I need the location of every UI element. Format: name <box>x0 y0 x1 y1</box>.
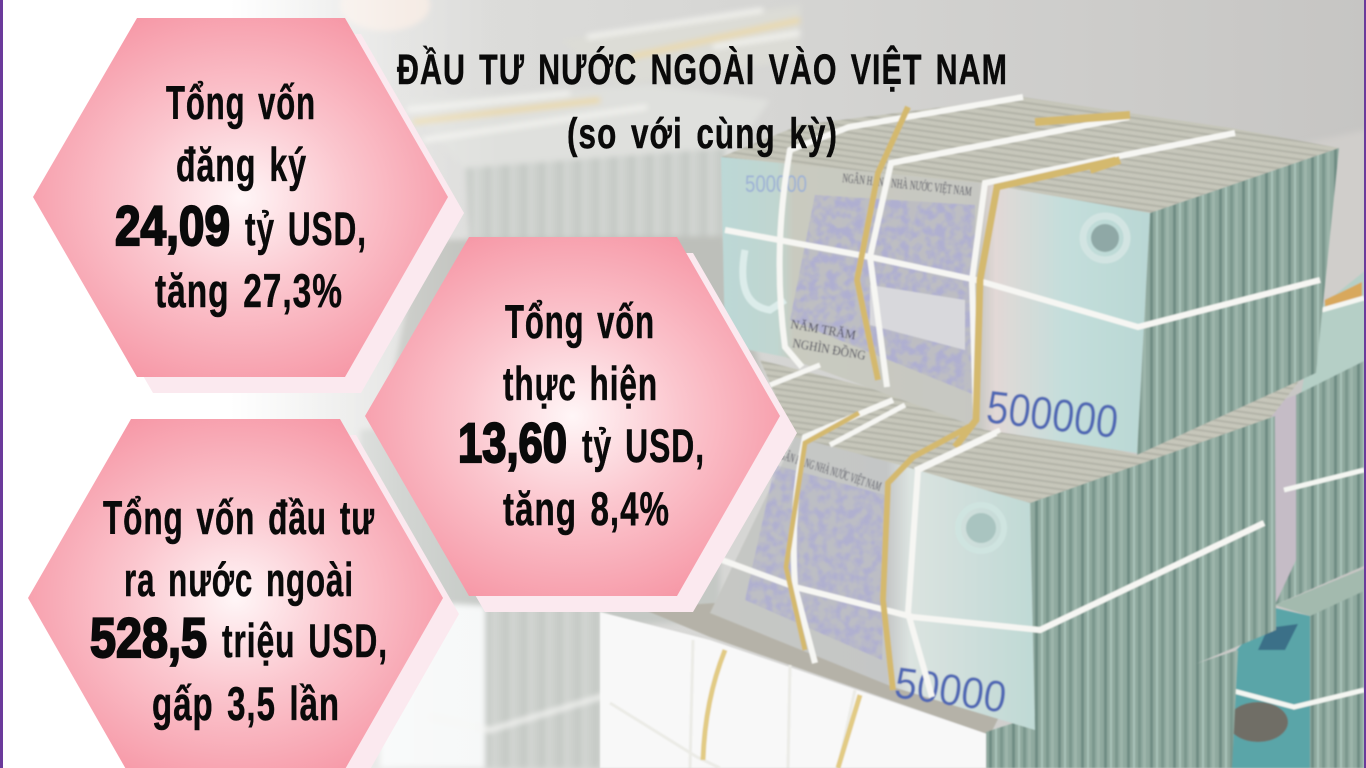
panel: registered capital: 24,09 <box>115 194 230 257</box>
panel: registered capital <box>33 18 464 393</box>
right-hand rear stack <box>1300 270 1366 400</box>
panel: implemented capital: tăng 8,4% <box>503 482 670 535</box>
panel: outward investment: triệu USD, <box>222 614 388 667</box>
purple frame edge right <box>1364 0 1366 768</box>
lower main bundle <box>760 360 1300 503</box>
purple frame edge left <box>0 0 3 768</box>
rear out-of-focus bundles <box>340 0 1366 768</box>
panel: implemented capital: Tổng vốn <box>505 295 655 348</box>
background photo: stacks of banknotes: 500000 <box>745 171 807 198</box>
panel: outward investment: gấp 3,5 lần <box>152 677 340 730</box>
panel: registered capital: đăng ký <box>176 138 307 191</box>
title <box>397 45 1008 158</box>
print on upper note <box>790 195 975 395</box>
panel: outward investment: Tổng vốn đầu tư <box>103 491 375 544</box>
print on lower note <box>745 465 885 660</box>
background photo: stacks of banknotes: NĂM TRĂM <box>789 316 857 342</box>
panel: registered capital: tỷ USD, <box>245 202 367 255</box>
title: (so với cùng kỳ) <box>567 110 838 158</box>
panel: implemented capital: 13,60 <box>458 411 567 474</box>
background photo: stacks of banknotes: NGÂN HÀNG NHÀ NƯỚC VIỆT NAM <box>842 170 973 199</box>
upper main bundle <box>721 97 1339 213</box>
panel: implemented capital: tỷ USD, <box>582 419 705 472</box>
white bundle bottom centre <box>600 612 990 768</box>
panel: outward investment <box>28 419 459 768</box>
title: ĐẦU TƯ NƯỚC NGOÀI VÀO VIỆT NAM <box>397 45 1008 94</box>
panel: implemented capital: thực hiện <box>503 357 658 410</box>
panel: registered capital: tăng 27,3% <box>155 264 343 317</box>
panel: registered capital: Tổng vốn <box>166 76 316 129</box>
panel: outward investment: ra nước ngoài <box>124 553 354 606</box>
panel: outward investment: 528,5 <box>90 606 207 669</box>
background photo: stacks of banknotes: NGÂN HÀNG NHÀ NƯỚC VIỆT NAM <box>774 446 884 494</box>
white fade over left of photo <box>0 0 500 768</box>
panel: implemented capital <box>365 237 797 612</box>
value on lower note: 50000 <box>892 658 1009 722</box>
background photo: stacks of banknotes: NGHÌN ĐỒNG <box>791 335 867 363</box>
value on upper note: 500000 <box>984 380 1121 448</box>
